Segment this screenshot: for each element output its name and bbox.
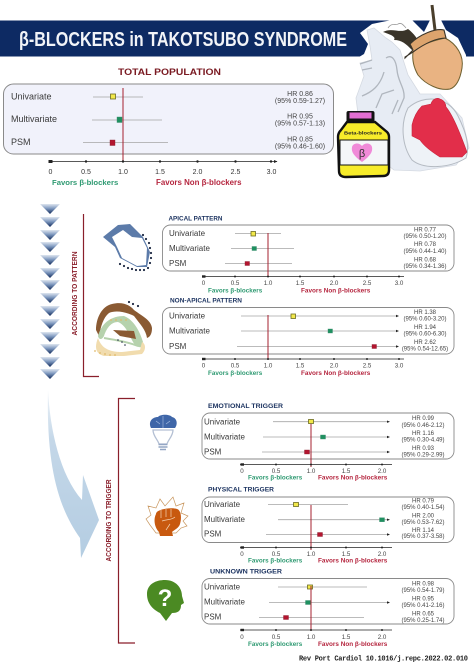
row: PSM (204, 528, 445, 540)
axis: apical pattern: 0.5 (231, 280, 240, 287)
axis: unknown trigger: 0 (240, 634, 244, 641)
icon: apical ballooning (103, 224, 152, 271)
panel box (4, 84, 334, 154)
row: multivariate: HR 0.95 (412, 596, 435, 602)
illustration: heart and beta-blocker bottle (335, 5, 474, 180)
citation: Rev Port Cardiol 10.1016/j.repc.2022.02.010 (299, 656, 468, 664)
dark ribbon (383, 29, 420, 50)
header band (0, 20, 474, 56)
row: PSM (204, 446, 445, 458)
suspension stick (432, 5, 435, 30)
axis: physical trigger: 0.5 (272, 551, 281, 558)
axis: physical trigger: 2.0 (378, 551, 387, 558)
axis: non-apical pattern: 3.0 (395, 362, 404, 370)
vessels shading (360, 57, 404, 114)
row: univariate: (95% 0.60-3.20) (403, 316, 447, 322)
axis: total population: Favors Non β-blockers (156, 178, 242, 187)
axis: non-apical pattern: Favors Non β-blockers (301, 370, 371, 377)
axis: apical pattern: 2.5 (363, 280, 372, 287)
row: PSM: (95% 0.37-3.58) (401, 534, 445, 540)
axis: emotional trigger: Favors Non β-blockers (318, 474, 388, 482)
panel: emotional trigger (202, 413, 454, 459)
row: PSM: (95% 0.54-12.65) (402, 346, 448, 352)
icon: question head (147, 580, 184, 621)
row: PSM: PSM (169, 259, 187, 268)
balloon collar (405, 30, 446, 58)
row: multivariate (11, 114, 325, 128)
row: PSM: HR 0.68 (414, 258, 437, 264)
panel: total population forest plot (4, 84, 334, 154)
row: PSM: HR 2.62 (414, 340, 437, 346)
row: univariate (204, 498, 445, 511)
heading: emotional trigger: EMOTIONAL TRIGGER (208, 403, 283, 410)
axis: non-apical pattern: 1.5 (296, 362, 305, 370)
axis: unknown trigger: 2.0 (378, 634, 387, 641)
axis: total population: 1.5 (155, 169, 165, 176)
pericardial sac (403, 99, 468, 167)
chevron column (40, 204, 60, 379)
axis: physical trigger: Favors β-blockers (248, 558, 303, 564)
row: PSM: PSM (204, 612, 222, 622)
row: multivariate: (95% 0.41-2.16) (401, 603, 445, 609)
reference line (267, 315, 269, 360)
axis: unknown trigger: 1.0 (307, 634, 316, 641)
axis: non-apical pattern: 0.5 (231, 362, 240, 370)
row: multivariate (169, 325, 447, 338)
row: univariate: HR 0.99 (412, 416, 435, 422)
axis: apical pattern: 3.0 (395, 280, 404, 287)
row: multivariate (204, 514, 445, 526)
row: multivariate: (95% 0.44-1.40) (403, 249, 447, 255)
axis: apical pattern: Favors β-blockers (208, 288, 263, 294)
row: PSM: (95% 0.46-1.60) (275, 144, 325, 150)
row: multivariate (169, 242, 447, 255)
row: univariate: (95% 0.46-2.12) (401, 423, 445, 429)
row: multivariate: Multivariate (11, 114, 57, 124)
icon: fist (146, 497, 188, 536)
row: univariate: HR 0.77 (414, 228, 437, 234)
row: PSM: (95% 0.29-2.99) (401, 452, 445, 458)
axis: physical trigger: 1.0 (307, 551, 316, 558)
row: multivariate: HR 1.94 (414, 325, 437, 331)
axis: emotional trigger: Favors β-blockers (248, 474, 303, 482)
axis: unknown trigger: 0.5 (272, 634, 281, 641)
row: univariate: HR 0.79 (412, 498, 435, 504)
row: multivariate: HR 0.78 (414, 242, 437, 248)
heading: non-apical pattern: NON-APICAL PATTERN (170, 298, 242, 304)
row: multivariate: Multivariate (204, 432, 245, 442)
row: univariate: Univariate (204, 500, 241, 509)
row: PSM: PSM (204, 530, 222, 538)
icon: brain light bulb (150, 415, 177, 450)
reference line (310, 586, 312, 631)
axis: apical pattern (202, 275, 404, 294)
axis: non-apical pattern: 1.0 (264, 362, 273, 370)
icon: non-apical ballooning (94, 301, 152, 356)
panel: apical pattern (162, 225, 454, 271)
axis: physical trigger: 0 (240, 551, 244, 558)
axis: non-apical pattern: Favors β-blockers (208, 370, 263, 377)
white tuft (388, 23, 406, 28)
row: univariate: Univariate (169, 312, 206, 320)
axis: physical trigger: Favors Non β-blockers (318, 558, 388, 564)
curved arrow (48, 390, 99, 558)
row: univariate (11, 91, 325, 105)
pink heart (352, 143, 372, 162)
panel: unknown trigger (202, 578, 454, 624)
row: multivariate: Multivariate (204, 515, 245, 524)
axis: unknown trigger: Favors Non β-blockers (318, 641, 388, 648)
axis: total population: 2.5 (231, 169, 240, 176)
axis: total population: 0.5 (81, 169, 91, 176)
row: univariate: Univariate (169, 229, 206, 238)
row: multivariate: Multivariate (169, 244, 210, 253)
icon: question head: ? (158, 585, 172, 612)
axis: total population: 3.0 (267, 169, 276, 176)
row: univariate: (95% 0.50-1.20) (403, 234, 447, 240)
row: multivariate: Multivariate (169, 326, 210, 336)
row: univariate (204, 416, 445, 429)
row: PSM: HR 0.85 (287, 136, 313, 144)
row: multivariate: (95% 0.30-4.49) (401, 438, 445, 444)
label: according to pattern: ACCORDING TO PATTERN (70, 252, 79, 336)
reference line (122, 88, 124, 162)
label: according to trigger: ACCORDING TO TRIGGER (104, 479, 113, 562)
axis: apical pattern: 2.0 (330, 280, 339, 287)
row: univariate: (95% 0.40-1.54) (401, 505, 445, 511)
bottle body (338, 122, 389, 177)
row: univariate: (95% 0.59-1.27) (275, 98, 325, 105)
row: PSM: PSM (204, 448, 222, 456)
row: multivariate: HR 1.16 (412, 431, 435, 437)
row: univariate: Univariate (11, 92, 52, 102)
axis: emotional trigger: 1.5 (342, 468, 351, 475)
axis: non-apical pattern: 2.5 (363, 362, 372, 370)
row: multivariate: HR 2.00 (412, 514, 435, 520)
panel: non-apical pattern (162, 308, 454, 354)
axis: total population: 0 (49, 169, 53, 176)
axis: total population: Favors β-blockers (52, 178, 118, 187)
row: PSM: PSM (11, 137, 31, 147)
row: multivariate: (95% 0.53-7.62) (401, 520, 445, 526)
row: PSM (169, 340, 448, 352)
row: multivariate: (95% 0.60-6.30) (403, 332, 447, 338)
row: multivariate: HR 0.95 (287, 114, 313, 120)
axis: apical pattern: 1.0 (264, 280, 273, 287)
row: PSM: (95% 0.34-1.36) (403, 264, 447, 270)
row: PSM (169, 258, 447, 270)
bottle white label (340, 140, 388, 165)
reference line (267, 233, 269, 277)
axis: emotional trigger (240, 463, 392, 482)
row: univariate: HR 0.98 (412, 582, 435, 588)
reference line (310, 424, 312, 467)
axis: apical pattern: 0 (202, 280, 206, 287)
axis: emotional trigger: 0 (240, 468, 244, 475)
heading: apical pattern: APICAL PATTERN (168, 216, 223, 222)
row: univariate (204, 582, 445, 594)
axis: total population: 1.0 (118, 169, 128, 176)
bottle text: Beta-blockers (344, 130, 383, 136)
axis: non-apical pattern: 0 (202, 362, 206, 370)
axis: physical trigger (240, 546, 392, 564)
axis: emotional trigger: 1.0 (307, 468, 316, 475)
reference line (310, 505, 312, 550)
axis: unknown trigger (240, 629, 392, 648)
axis: emotional trigger: 2.0 (378, 468, 387, 475)
axis: physical trigger: 1.5 (342, 551, 351, 558)
axis: unknown trigger: 1.5 (342, 634, 351, 641)
row: PSM (204, 612, 445, 624)
white cut-out around heart (335, 20, 474, 180)
row: univariate (169, 310, 447, 322)
row: PSM: HR 0.93 (412, 446, 435, 452)
panel: physical trigger (202, 497, 454, 542)
row: PSM: PSM (169, 342, 187, 351)
axis: non-apical pattern (202, 358, 404, 377)
bracket: trigger (118, 398, 135, 643)
heart body (356, 28, 469, 171)
axis: emotional trigger: 0.5 (272, 468, 281, 475)
heading: unknown trigger: UNKNOWN TRIGGER (210, 568, 282, 576)
beta symbol: β (359, 148, 365, 160)
axis: apical pattern: Favors Non β-blockers (301, 288, 371, 294)
row: univariate: HR 1.38 (414, 310, 437, 316)
bracket: pattern (84, 214, 99, 376)
row: PSM: HR 0.65 (412, 612, 435, 618)
row: PSM: (95% 0.25-1.74) (401, 618, 445, 624)
row: multivariate (204, 596, 445, 609)
row: univariate: Univariate (204, 582, 241, 592)
axis: apical pattern: 1.5 (296, 280, 305, 287)
row: univariate (169, 228, 447, 240)
heading: total population: TOTAL POPULATION (118, 67, 221, 78)
title: β-BLOCKERS in TAKOTSUBO SYNDROME (19, 29, 347, 51)
row: PSM: HR 1.14 (412, 528, 435, 534)
row: univariate: (95% 0.54-1.79) (401, 588, 445, 594)
red heart (412, 98, 467, 157)
cap label (350, 112, 372, 118)
row: univariate: HR 0.86 (287, 91, 313, 98)
row: PSM (11, 136, 325, 150)
axis: unknown trigger: Favors β-blockers (248, 641, 303, 648)
row: univariate: Univariate (204, 418, 241, 426)
row: multivariate (204, 431, 445, 444)
heading: physical trigger: PHYSICAL TRIGGER (208, 486, 274, 494)
row: multivariate: Multivariate (204, 598, 245, 606)
axis: total population (48, 160, 278, 187)
row: multivariate: (95% 0.57-1.13) (275, 120, 325, 128)
bottle cap (346, 111, 374, 122)
tan apical balloon (413, 38, 462, 89)
axis: total population: 2.0 (193, 169, 202, 176)
axis: non-apical pattern: 2.0 (330, 362, 339, 370)
